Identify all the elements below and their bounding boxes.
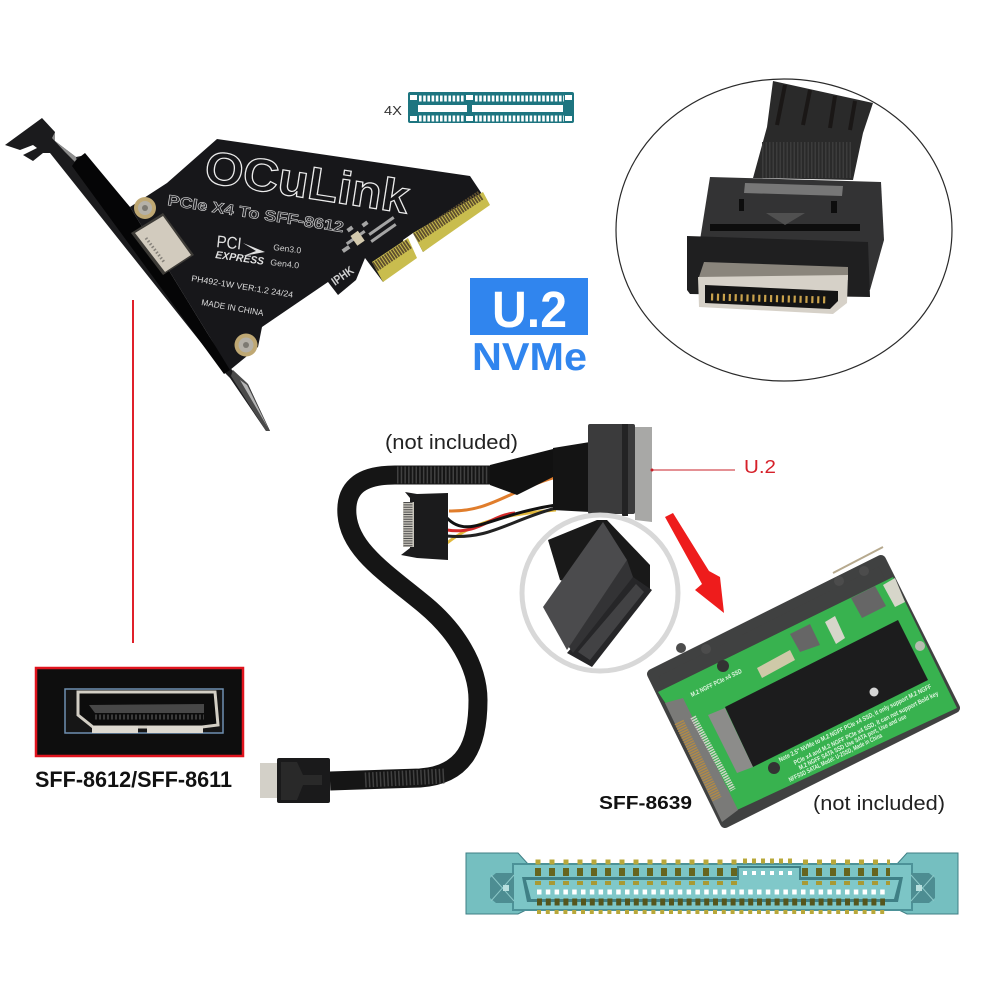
circuit board — [130, 139, 488, 370]
U.2 plug — [588, 424, 652, 522]
connector outline — [466, 853, 958, 914]
board subtitle: PCIe X4 To SFF-8612 — [166, 192, 345, 236]
upper mounting screw — [134, 197, 156, 219]
panel: SFF-8639 connector diagram — [466, 853, 958, 914]
PCI Express logo — [215, 232, 265, 268]
ribbon cable — [753, 81, 873, 180]
braided sleeve lower — [365, 776, 445, 780]
PCI Express logo: EXPRESS — [215, 249, 265, 268]
plug boot — [548, 520, 650, 600]
gold connector pins — [679, 722, 717, 799]
enclosure frame — [652, 560, 955, 823]
board notes: Note 2.5" NVMe to M.2 NGFF PCIe x4 SSD, it only support M.2 NGFF — [778, 683, 933, 764]
socket tongue — [89, 704, 204, 713]
icon: 4X PCIe slot — [408, 92, 574, 123]
latch spring — [833, 547, 883, 573]
U.2 NVMe logo: NVMe — [472, 336, 587, 379]
small components — [342, 216, 397, 253]
standoff screws — [676, 566, 925, 774]
plug opening — [705, 285, 838, 309]
gold fingers: short section — [372, 238, 417, 282]
panel: PCIe adapter card — [5, 118, 490, 431]
panel: M.2 to U.2 adapter enclosure — [652, 547, 957, 823]
latch detail — [710, 199, 860, 231]
card slot inner — [526, 868, 899, 899]
SATA power wires — [447, 477, 556, 543]
generation labels — [270, 242, 302, 271]
circle outline — [616, 79, 952, 381]
socket metal tabs — [92, 726, 203, 733]
M.2 recess — [725, 620, 928, 767]
SFF-8612 socket on card — [131, 213, 194, 275]
lower mounting screw — [234, 334, 258, 356]
metal bracket — [5, 118, 270, 431]
cable boot — [553, 442, 590, 512]
generation labels: Gen3.0 — [273, 242, 302, 255]
metal plug top — [698, 262, 848, 280]
4X slot label: 4X — [384, 103, 402, 118]
generation labels: Gen4.0 — [270, 257, 300, 271]
label strip — [744, 183, 843, 196]
red leader line — [132, 300, 134, 643]
label: SFF-8639: SFF-8639 — [599, 793, 692, 813]
pin rows — [535, 861, 890, 912]
board title: OCuLink: OCuLink — [201, 140, 413, 223]
board notes: NFFSSD SATAL Model: U-2SSD, Made in China — [788, 732, 884, 784]
contact row — [693, 717, 733, 790]
left latch pocket — [490, 873, 514, 903]
right latch pocket — [911, 873, 935, 903]
grey ring — [522, 515, 678, 671]
origin label: MADE IN CHINA — [201, 297, 265, 318]
U.2 callout: U.2 — [744, 457, 776, 477]
cable sleeve taper — [490, 449, 553, 495]
card slot outer — [522, 866, 903, 902]
panel: OCuLink connector close-up — [616, 79, 952, 381]
board notes: PCIe x4 and M.2 NGFF PCIe x4 SSD, it can not support Bold key — [793, 690, 940, 767]
maker logo: IPHK — [329, 263, 357, 288]
M.2 socket — [708, 708, 753, 773]
U.2 NVMe logo — [470, 278, 588, 379]
socket pins — [95, 714, 204, 720]
arrow: red, plug to adapter — [665, 513, 724, 613]
connector rear body — [700, 177, 884, 290]
board notes: M.2 NGFF SATA SSD Use SATA port, Use and use — [798, 713, 908, 772]
U.2 callout — [650, 457, 776, 477]
board notes: M.2 NGFF PCIe x4 SSD — [690, 668, 743, 699]
plug shoulder — [562, 560, 633, 653]
label: not included, adapter: (not included) — [813, 793, 945, 815]
main sleeved cable — [330, 475, 495, 781]
model label: PH492-1W VER:1.2 24/24 — [191, 273, 294, 300]
SATA power connector — [401, 492, 448, 560]
bracket upright strip — [72, 153, 230, 374]
board notes — [690, 668, 940, 784]
green circuit board — [658, 577, 957, 810]
PCI Express logo: PCI — [216, 232, 242, 254]
regulator components — [757, 578, 905, 678]
metal plug face — [698, 275, 848, 314]
label: SFF-8612/SFF-8611: SFF-8612/SFF-8611 — [35, 767, 232, 792]
socket frame — [65, 689, 223, 733]
U.2 NVMe logo: U.2 — [492, 281, 567, 338]
panel: U.2 plug close-up — [522, 515, 678, 671]
plug blade — [567, 577, 652, 667]
plug cover — [543, 522, 627, 650]
label: not included, cable: (not included) — [385, 432, 518, 454]
socket shell — [78, 692, 218, 727]
gold fingers: long section — [413, 192, 490, 252]
braided sleeve upper — [397, 466, 488, 484]
connector front block — [687, 236, 870, 297]
OCuLink plug — [260, 758, 330, 803]
connector housing — [513, 864, 912, 910]
edge connector housing — [665, 698, 738, 822]
cable assembly — [260, 424, 652, 803]
panel: SFF-8612 socket photo — [36, 668, 243, 756]
gold contact pins — [711, 297, 828, 300]
